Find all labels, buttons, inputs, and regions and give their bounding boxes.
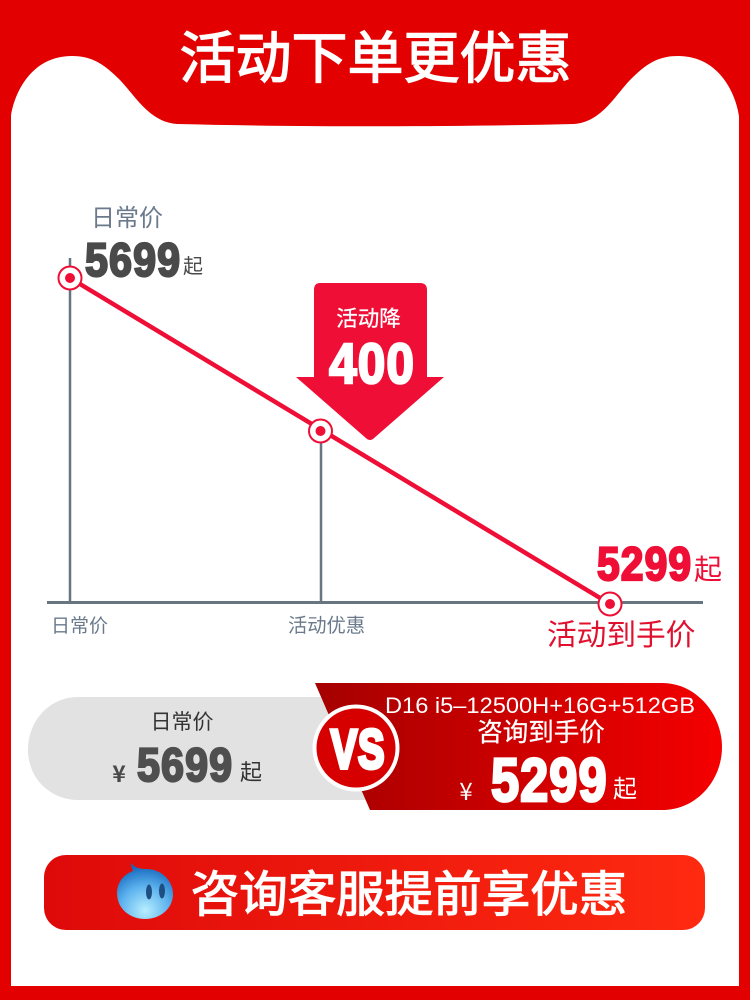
- activity price panel: 5299: [491, 746, 608, 814]
- regular price pill: 起: [240, 755, 262, 787]
- axis label: regular price: 日常价: [51, 611, 108, 638]
- axis label: activity discount: 活动优惠: [288, 610, 365, 638]
- value: final price: 5299: [597, 538, 692, 591]
- activity price panel: [315, 683, 722, 814]
- title: 活动下单更优惠: [180, 14, 572, 95]
- regular price pill: [28, 697, 400, 800]
- activity price panel: D16 i5–12500H+16G+512GB: [385, 693, 695, 718]
- activity price panel: 起: [613, 769, 637, 804]
- VS badge: VS: [331, 720, 385, 781]
- VS badge: [314, 706, 398, 790]
- left vertical guide: [69, 258, 71, 602]
- label: final price: 活动到手价: [547, 611, 695, 654]
- icon: qq penguin drop: [117, 863, 173, 919]
- regular price pill: ¥: [112, 755, 126, 789]
- data point: regular price: [58, 266, 82, 290]
- value: final price: 起: [694, 548, 722, 588]
- value: regular price: 起: [183, 250, 203, 279]
- data point: activity discount: [309, 420, 332, 442]
- regular price pill: 日常价: [150, 706, 214, 736]
- call to action button: [44, 855, 705, 930]
- button label: 咨询客服提前享优惠: [191, 855, 627, 925]
- middle vertical guide: [320, 431, 322, 602]
- activity price panel: ¥: [459, 772, 473, 807]
- activity price panel: 咨询到手价: [477, 712, 605, 749]
- price drop chart: [47, 198, 722, 654]
- regular price pill: 5699: [137, 740, 233, 792]
- value: regular price: 5699: [85, 235, 181, 287]
- price trend line: [70, 278, 610, 604]
- arrow callout: activity price cut: [296, 283, 444, 440]
- label: regular price: 日常价: [91, 198, 163, 233]
- arrow callout: activity price cut: 400: [329, 333, 415, 396]
- chart axis: [47, 601, 703, 604]
- arrow callout: activity price cut: 活动降: [336, 302, 401, 333]
- data point: final price: [598, 592, 622, 616]
- comparison panel: [28, 683, 722, 814]
